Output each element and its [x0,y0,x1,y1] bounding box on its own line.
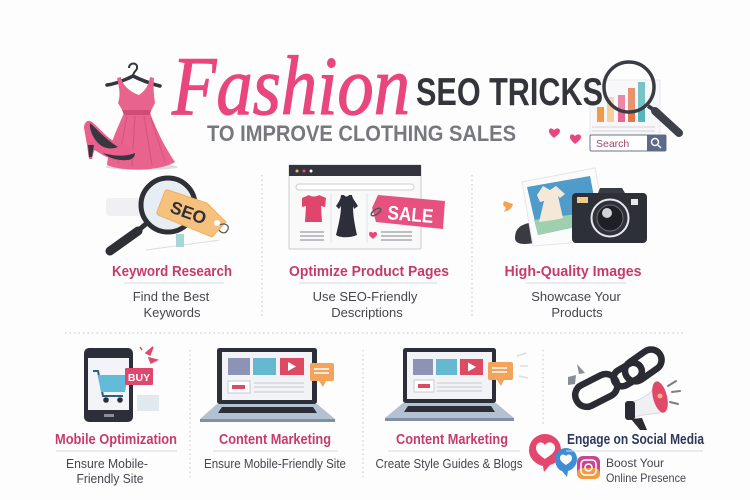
panel: keyword research [106,178,232,320]
heading: Keyword Research [112,264,232,280]
magnifier [604,62,679,133]
sale tag: SALE [387,202,434,228]
description: Ensure Mobile-Friendly Site [204,456,346,471]
search box: Search [596,138,629,150]
panel: optimize product pages: Descriptions [331,305,403,320]
panel: content marketing (blogs) [376,348,528,471]
description: Boost Your [606,456,664,470]
panel: mobile optimization [55,347,177,486]
panel: high-quality images [503,168,647,320]
description: Showcase Your [531,289,621,304]
heading: High-Quality Images [504,264,642,280]
description: Use SEO-Friendly [313,289,418,304]
icon: pink dress on hanger with high heel [84,64,178,170]
heading: Content Marketing [219,432,331,448]
sale tag [370,195,445,229]
heading: Optimize Product Pages [289,264,449,280]
icon: laptop with content cards [200,348,335,420]
icon: magnifier over bar chart and search box [590,62,679,151]
icon: chain links [571,345,666,411]
panel: content marketing (site) [200,348,346,471]
description: Ensure Mobile- [66,456,148,471]
icon: browser window with products [289,165,445,249]
heading: Engage on Social Media [567,432,705,448]
description: Find the Best [133,289,210,304]
icon: grey shards [568,364,585,385]
heading: Content Marketing [396,432,508,448]
description: Create Style Guides & Blogs [376,456,523,471]
bar chart [597,82,645,122]
title: Fashion SEO Tricks [171,40,603,146]
panel: optimize product pages [289,165,449,320]
icon: laptop with content cards [385,348,528,420]
red t-shirt [302,195,326,222]
panel: engage on social media [529,345,705,485]
icon: photo and camera [503,168,647,246]
panel: high-quality images: Products [551,305,603,320]
icon: phone with cart: BUY [128,372,150,384]
icon: social speech bubbles [529,434,600,479]
panel: mobile optimization: Friendly Site [76,471,144,486]
icon: magnifier with SEO tag [106,178,228,251]
title words: SEO Tricks: SEO TRICKS [416,71,603,114]
panel: engage on social media: Online Presence [606,471,686,485]
black dress [336,195,358,237]
heading: Mobile Optimization [55,432,177,448]
title word: Fashion: Fashion [171,40,410,133]
icon: magnifier with SEO tag: SEO [168,197,209,228]
icon: pink hearts [549,128,581,144]
subtitle: TO IMPROVE CLOTHING SALES [207,121,516,146]
icon: megaphone [625,380,680,430]
panel: keyword research: Keywords [143,305,201,320]
